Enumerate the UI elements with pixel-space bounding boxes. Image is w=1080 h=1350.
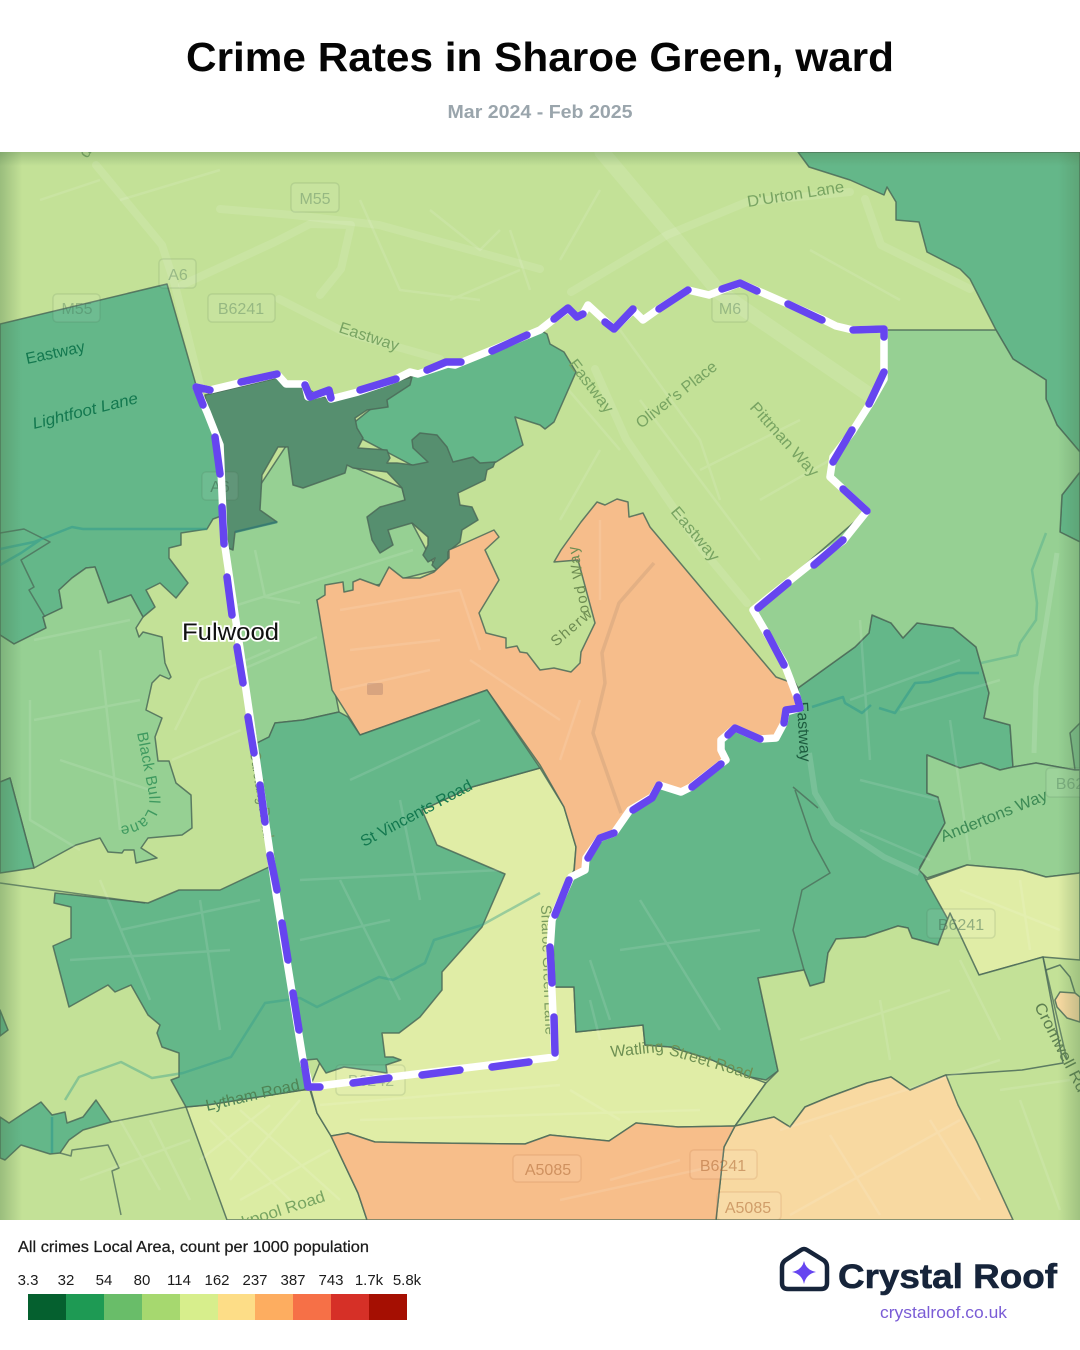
legend ticks: 80 bbox=[134, 1272, 150, 1289]
legend ticks: 54 bbox=[96, 1272, 112, 1289]
area: ward north medium green bbox=[356, 332, 577, 465]
road shields: B6242 bbox=[348, 1073, 394, 1090]
road shields: M55 bbox=[61, 301, 93, 318]
streams bbox=[0, 527, 1046, 1153]
road shields: A6 bbox=[210, 479, 230, 496]
road shields: A5085 bbox=[725, 1200, 771, 1217]
legend ticks: 162 bbox=[204, 1272, 230, 1289]
road labels: Andertons Way bbox=[938, 787, 1050, 846]
area: north west green zone bbox=[0, 284, 224, 644]
area: far east patch bbox=[1060, 472, 1080, 542]
area: far east patch by B road bbox=[1070, 723, 1080, 770]
area: ward dark green zone bbox=[205, 377, 495, 570]
road labels: Black Bull Lane bbox=[121, 732, 160, 834]
area: far east mid green bbox=[919, 755, 1080, 878]
road labels: D'Urton Lane bbox=[746, 179, 846, 211]
place label: Fulwood: Fulwood bbox=[182, 619, 279, 646]
road labels: Blackpool Road bbox=[208, 1189, 327, 1242]
subtitle: date range: Mar 2024 - Feb 2025 bbox=[448, 101, 632, 122]
area: ward west centre light green bbox=[224, 440, 437, 743]
road labels: Oliver's Place bbox=[633, 358, 721, 432]
road labels: Pittman Way bbox=[746, 399, 822, 481]
logo wordmark: Crystal Roof bbox=[838, 1258, 1058, 1296]
legend ticks: 1.7k bbox=[355, 1272, 384, 1289]
orange zone footpath and building bbox=[340, 520, 654, 813]
icon: house with star bbox=[782, 1249, 827, 1289]
road labels: Garstang Road bbox=[246, 750, 277, 840]
road labels: Eastway bbox=[565, 356, 616, 417]
road network base layer bbox=[40, 154, 974, 607]
legend ticks: 114 bbox=[167, 1272, 191, 1289]
legend ticks bbox=[18, 1272, 422, 1289]
stream at dark zone edge bbox=[235, 522, 277, 532]
road shields bbox=[53, 183, 1080, 1220]
legend colour scale bbox=[28, 1294, 407, 1320]
ward boundary: purple dashes bbox=[196, 283, 884, 1087]
area: top right green zone bbox=[798, 152, 1080, 452]
road labels: Sherwood Way bbox=[551, 547, 592, 646]
area: east pale yellow bbox=[926, 865, 1080, 975]
road shields: B6241 bbox=[218, 301, 264, 318]
legend ticks: 5.8k bbox=[393, 1272, 422, 1289]
road labels: Lytham Road bbox=[204, 1077, 301, 1115]
boundary lines inside areas bbox=[0, 529, 1067, 1215]
road shields: B6241 bbox=[938, 917, 984, 934]
legend ticks: 3.3 bbox=[18, 1272, 38, 1289]
road labels: Eastway bbox=[793, 701, 813, 762]
legend ticks: 32 bbox=[58, 1272, 74, 1289]
road shields: M55 bbox=[299, 191, 331, 208]
area: east light green bbox=[753, 330, 1080, 770]
road labels: St Vincents Road bbox=[358, 777, 475, 851]
road shields: A6 bbox=[168, 267, 188, 284]
area: south west pale zone bbox=[186, 1090, 367, 1220]
road labels: Eastway bbox=[667, 504, 722, 565]
road labels: Lightfoot Lane bbox=[31, 390, 140, 433]
website link: crystalroof.co.uk bbox=[880, 1303, 1008, 1322]
area: south west green patch bbox=[0, 1100, 111, 1160]
legend title: All crimes Local Area, count per 1000 population bbox=[18, 1239, 369, 1256]
road labels: Eastway bbox=[24, 339, 87, 368]
road labels: Watling Street Road bbox=[610, 1042, 753, 1079]
road labels: d bbox=[76, 144, 95, 161]
area: small western triangle bbox=[0, 1010, 8, 1036]
area: west light green zone bbox=[0, 567, 192, 868]
area: pale yellow-green centre and Watling Street band bbox=[310, 768, 766, 1144]
area: east medium green bbox=[552, 615, 1013, 1080]
area: south east light green bbox=[735, 913, 1063, 1127]
area: A5085 orange band bbox=[331, 1123, 735, 1220]
secondary roads bbox=[30, 550, 1070, 1215]
area: south east light orange bbox=[716, 1075, 1013, 1220]
area: small light orange patch bbox=[1046, 965, 1080, 1022]
area: centre and lower west medium green bbox=[53, 690, 540, 1107]
legend ticks: 743 bbox=[318, 1272, 344, 1289]
legend bbox=[18, 1239, 422, 1320]
legend ticks: 237 bbox=[242, 1272, 268, 1289]
road shields: A5085 bbox=[525, 1162, 571, 1179]
road labels: Sharoe Green Lane bbox=[537, 905, 559, 1035]
ward boundary: white line bbox=[196, 283, 884, 1087]
area: ward orange zone bbox=[317, 499, 800, 873]
legend ticks: 387 bbox=[280, 1272, 306, 1289]
road shields: M6 bbox=[719, 301, 741, 318]
title: Crime Rates in Sharoe Green, ward bbox=[186, 34, 894, 80]
logo: Crystal Roof bbox=[782, 1249, 1058, 1322]
road shields: B6241 bbox=[700, 1158, 746, 1175]
road labels: Eastway bbox=[337, 320, 401, 355]
area: far west sliver bbox=[0, 778, 34, 873]
